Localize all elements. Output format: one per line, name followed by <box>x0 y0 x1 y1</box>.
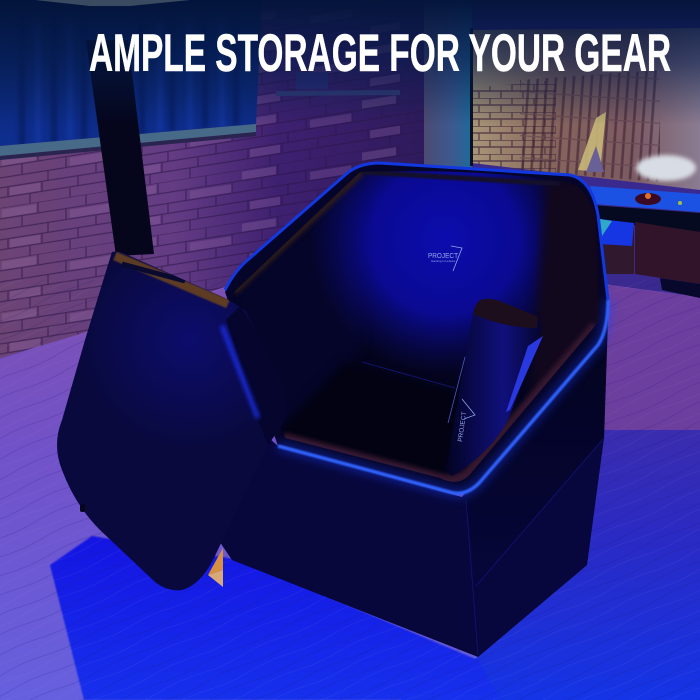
TV screen <box>470 28 700 190</box>
logo on back panel: PROJECT <box>428 253 459 260</box>
top dark overlay <box>0 0 700 125</box>
left wall <box>238 210 359 419</box>
lid blue edge <box>222 326 258 418</box>
LED rim back <box>225 163 608 300</box>
storage seat <box>57 162 616 657</box>
back panel glow <box>316 171 552 369</box>
outer box <box>205 310 608 657</box>
lid side face <box>226 306 287 445</box>
yellow wedge <box>208 548 223 587</box>
seat rim fill <box>225 163 608 493</box>
interior <box>232 171 600 482</box>
right wall <box>532 179 600 385</box>
TV stand <box>590 186 700 298</box>
logo on back panel <box>428 246 462 271</box>
ceiling lamp base <box>35 0 190 6</box>
bolster cushion: PROJECT <box>457 411 468 442</box>
desk leg <box>86 40 154 256</box>
brown trim left <box>234 172 362 292</box>
brown trim front <box>283 326 596 480</box>
lid sheen <box>100 265 256 430</box>
brick wall <box>0 0 430 370</box>
LED rim front glow <box>278 300 608 493</box>
LED rim front <box>278 300 608 493</box>
side pocket <box>476 438 604 657</box>
shelf on wall <box>276 72 400 96</box>
right side face <box>466 320 608 585</box>
bolster cushion <box>446 299 543 476</box>
seat floor <box>282 362 456 472</box>
hexagon lid <box>57 240 300 590</box>
lid strap <box>122 264 185 281</box>
box seams <box>466 438 604 655</box>
curtain and window sill <box>0 0 262 160</box>
floor <box>0 240 700 700</box>
lid top strip <box>115 256 228 304</box>
logo on back panel: Gaming in Leisure <box>431 259 456 263</box>
lid latch <box>80 504 85 512</box>
blue wall column <box>424 0 472 172</box>
